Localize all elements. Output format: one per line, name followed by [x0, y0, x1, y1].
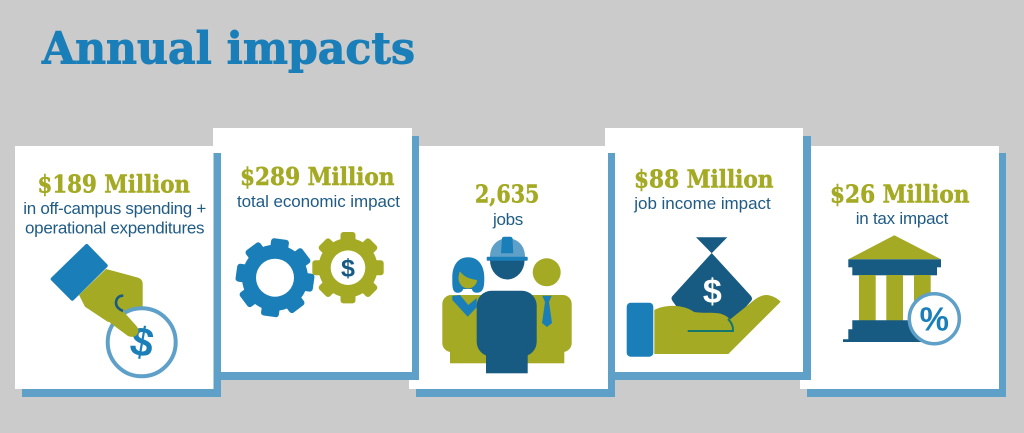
icon: three people [442, 237, 572, 373]
icon: green gear with dollar [312, 232, 384, 303]
heading: 2,635: 2,635 [475, 180, 539, 209]
panel: tax impact [800, 146, 1006, 397]
icon: money bag on hand [627, 237, 781, 357]
icon: blue gear [235, 238, 315, 318]
heading: $26 Million: $26 Million [830, 179, 970, 208]
panel: off-campus spending [15, 146, 221, 397]
icon: money bag on hand: $ [703, 273, 722, 311]
text: total economic impact: total economic impact [237, 192, 400, 211]
icon: gears [235, 232, 384, 318]
icon: hand placing coin: $ [127, 317, 157, 367]
heading: $189 Million: $189 Million [38, 170, 190, 199]
panel: total economic impact [213, 128, 419, 380]
text: jobs: jobs [492, 210, 523, 229]
icon: bank with percent [843, 235, 959, 344]
text: in off-campus spending + operational expenditures: operational expenditures [25, 218, 204, 237]
icon: hand placing coin [53, 246, 176, 376]
text: job income impact: job income impact [633, 194, 771, 213]
text: in off-campus spending + operational expenditures: in off-campus spending + [23, 199, 206, 218]
title: Annual impacts [41, 24, 415, 74]
panel: jobs [409, 146, 615, 397]
text: in off-campus spending + operational expenditures [23, 199, 206, 237]
panel: job income impact [605, 128, 811, 380]
text: in tax impact: in tax impact [856, 209, 949, 228]
icon: green gear with dollar: $ [341, 254, 355, 282]
heading: $289 Million: $289 Million [240, 162, 394, 191]
icon: bank with percent: % [920, 300, 949, 338]
heading: $88 Million: $88 Million [634, 165, 774, 194]
